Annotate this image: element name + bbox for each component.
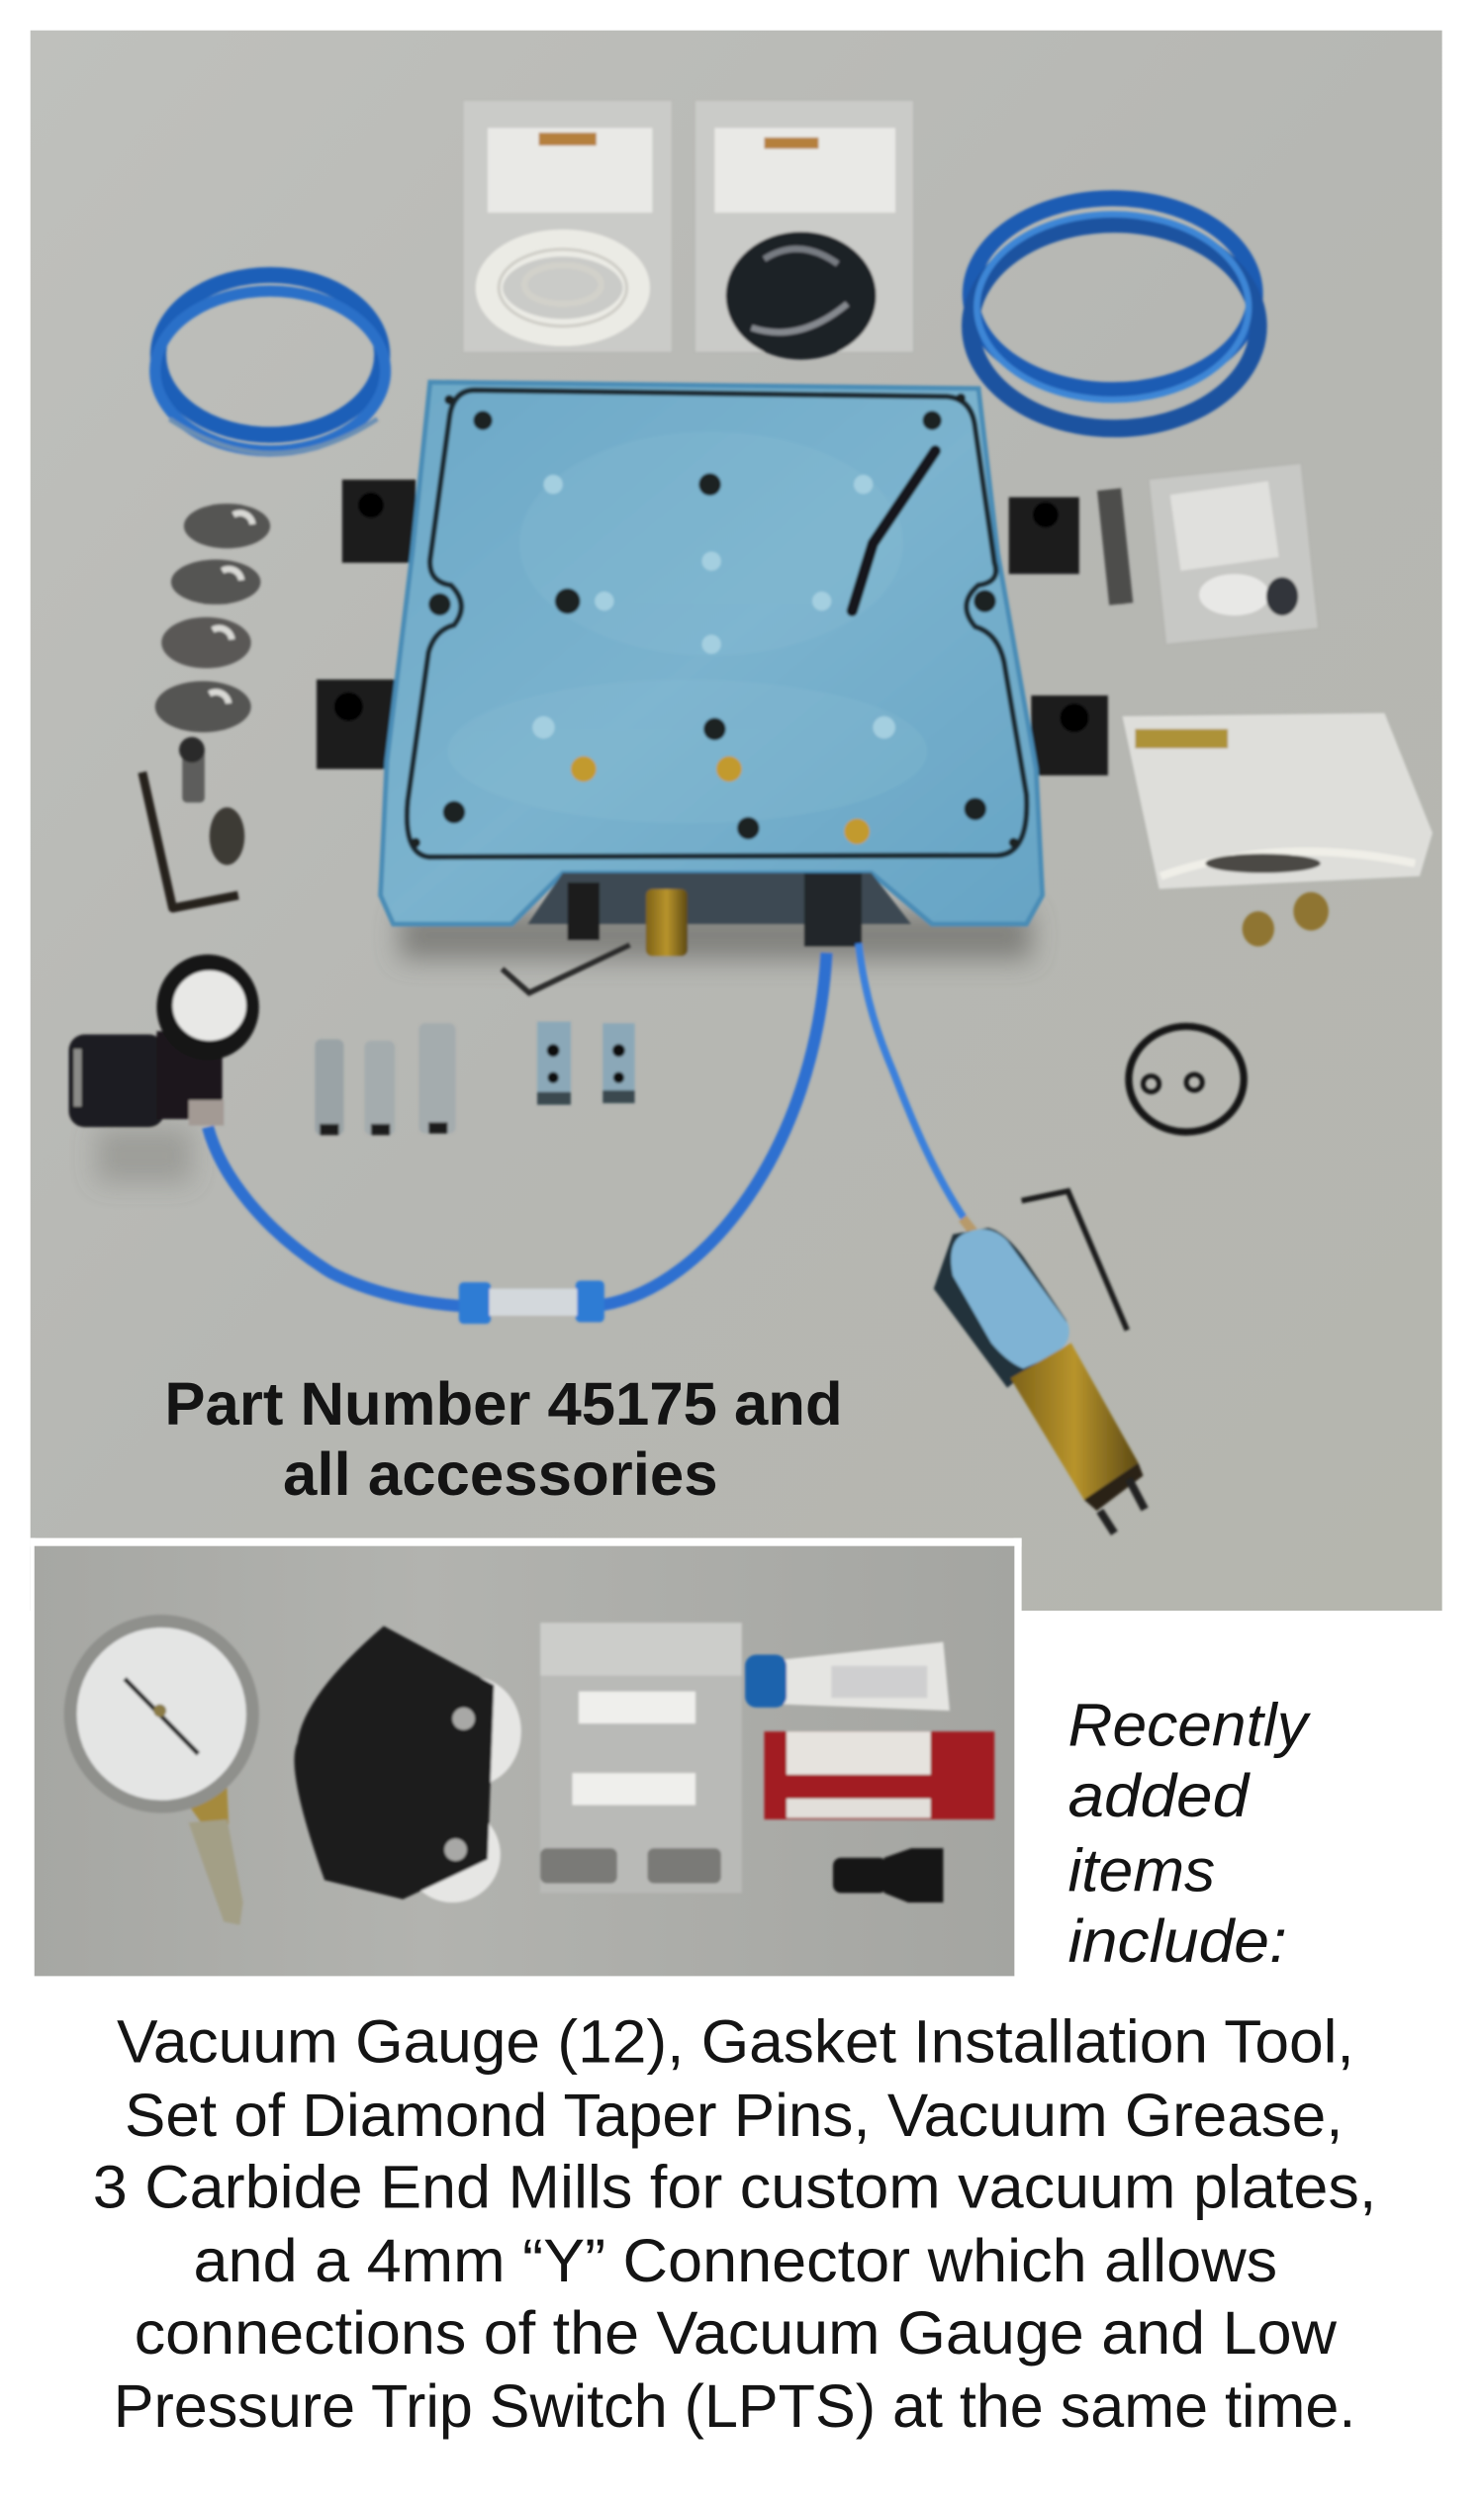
description text: Vacuum Gauge (12), Gasket Installation Tool, [117, 2008, 1354, 2077]
description text: connections of the Vacuum Gauge and Low [135, 2299, 1338, 2368]
caption: recently added items: added [1067, 1762, 1251, 1830]
card packet with brass nuts [1122, 713, 1433, 947]
blue tubing coil, right [971, 198, 1258, 428]
blue tubing and inline filter [208, 943, 964, 1324]
O-ring and small seals [1129, 1026, 1244, 1132]
carbide end mills [764, 1731, 994, 1819]
photo: main kit background [31, 31, 1442, 1611]
vacuum grease tube [745, 1642, 950, 1711]
caption: recently added items [1067, 1692, 1311, 1976]
spacer washers [155, 504, 270, 732]
pressure regulator with gauge [68, 955, 259, 1127]
diamond taper pins bag [540, 1623, 742, 1893]
photo: recently added items [35, 1546, 1014, 1976]
caption: part number: Part Number 45175 and [164, 1370, 843, 1439]
gasket installation tool [294, 1625, 521, 1903]
white cut-out around inset [31, 1538, 1484, 1987]
description text: Set of Diamond Taper Pins, Vacuum Grease, [125, 2082, 1343, 2150]
inset contents [64, 1615, 994, 1925]
caption: recently added items: include: [1067, 1907, 1287, 1976]
low pressure trip switch [934, 1191, 1145, 1533]
blue tubing coil, left [155, 275, 385, 453]
allen key on plate [852, 451, 935, 610]
black mounting blocks [317, 480, 1108, 776]
bolts and allen key, left [142, 737, 244, 908]
description text: and a 4mm “Y” Connector which allows [194, 2227, 1277, 2295]
soft shadows beneath parts [96, 911, 1031, 1183]
bag of black gasket cord [696, 101, 913, 360]
vacuum plate [381, 382, 1043, 924]
lighter plate highlights [447, 431, 927, 823]
caption: part number [164, 1370, 843, 1509]
blue clamp blocks [537, 1022, 635, 1105]
fixture holes [411, 394, 1018, 847]
description text: Pressure Trip Switch (LPTS) at the same time. [114, 2372, 1355, 2441]
plate fittings [502, 873, 862, 993]
caption: recently added items: items [1067, 1837, 1215, 1905]
photo contents: vacuum plate kit [68, 101, 1433, 1533]
description text [93, 2008, 1376, 2441]
description text: 3 Carbide End Mills for custom vacuum plates, [93, 2154, 1376, 2222]
air fitting plugs [315, 1023, 456, 1135]
caption: part number: all accessories [283, 1440, 718, 1509]
vacuum gauge [64, 1615, 259, 1925]
gasket [407, 390, 1027, 857]
Y connector [833, 1848, 943, 1903]
caption: recently added items: Recently [1067, 1692, 1311, 1760]
small parts bag and chain [1097, 464, 1318, 644]
bag of white gasket cord [464, 101, 672, 352]
